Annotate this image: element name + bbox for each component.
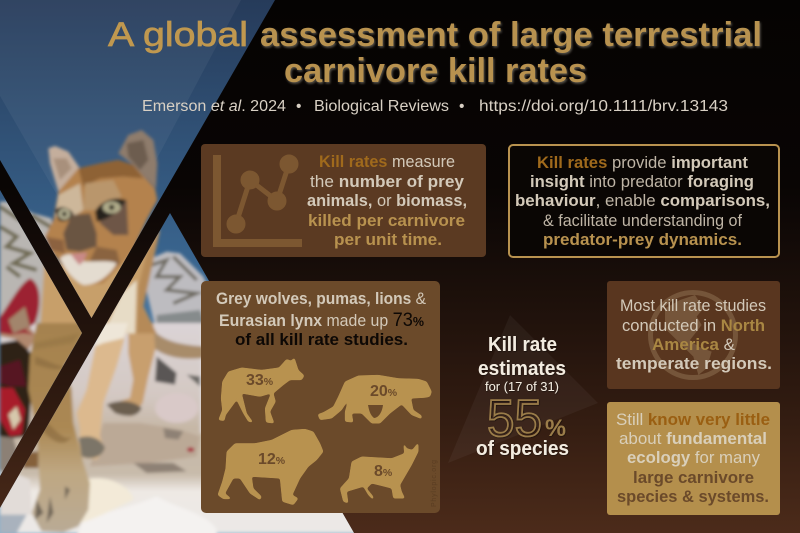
panel: knowledge gaps: large carnivore xyxy=(633,469,754,487)
citation line: • xyxy=(459,98,464,115)
citation line: Biological Reviews xyxy=(314,98,449,115)
panel: kill rate definition xyxy=(201,144,486,257)
icon: lynx xyxy=(340,442,418,503)
species text: Grey wolves, pumas, lions & xyxy=(216,290,426,308)
geography text: temperate regions. xyxy=(616,355,772,373)
panel: knowledge gaps: about fundamental xyxy=(619,430,767,448)
panel: geographic bias xyxy=(607,281,780,389)
icon: background triangle xyxy=(448,315,598,463)
photo: puma on a kill in snowy mountains xyxy=(0,0,367,533)
species percentages xyxy=(246,372,398,480)
panel: most studied species xyxy=(201,281,440,513)
callout: 55% of species: of species xyxy=(476,438,569,460)
icon: line chart xyxy=(217,155,302,243)
title xyxy=(108,16,762,90)
callout: 55% of species xyxy=(476,334,569,460)
citation line: https://doi.org/10.1111/brv.13143 xyxy=(479,98,728,115)
icon: grey wolf xyxy=(218,358,304,423)
callout: 55% of species: for (17 of 31) xyxy=(485,379,559,394)
panel: why kill rates matter: predator-prey dynamics. xyxy=(543,231,742,249)
panel: why kill rates matter: behaviour, enable comparisons, xyxy=(515,192,770,210)
panel: why kill rates matter: Kill rates provide important xyxy=(537,154,748,172)
silhouettes xyxy=(218,358,432,505)
definition text: Kill rates measure xyxy=(319,153,455,171)
callout: 55% of species: % xyxy=(545,415,566,442)
geography text: Most kill rate studies xyxy=(620,297,766,315)
definition text: the number of prey xyxy=(310,173,465,191)
panel: why kill rates matter: insight into predator foraging xyxy=(530,173,754,191)
species percentages: 12% xyxy=(258,451,286,468)
title: carnivore kill rates xyxy=(284,52,587,90)
icon: globe xyxy=(650,292,736,378)
species percentages: 33% xyxy=(246,372,274,389)
mountains xyxy=(0,202,217,333)
panel: why kill rates matter: & facilitate understanding of xyxy=(543,212,742,230)
tail and far hind leg xyxy=(107,323,203,416)
species percentages: 8% xyxy=(374,463,393,480)
carcass xyxy=(0,323,38,476)
geography text: conducted in North xyxy=(622,317,765,335)
title: A global xyxy=(108,16,248,54)
geography text: America & xyxy=(652,336,735,354)
species text: of all kill rate studies. xyxy=(235,331,408,349)
panel: knowledge gaps: species & systems. xyxy=(617,488,769,506)
definition text: animals, or biomass, xyxy=(307,192,467,210)
species text: Eurasian lynx made up 73% xyxy=(219,310,424,331)
species text xyxy=(216,290,426,349)
callout: 55% of species: 55 xyxy=(487,390,542,448)
snowy ground and rocks xyxy=(0,323,367,533)
definition text: killed per carnivore xyxy=(308,212,465,230)
citation line: Emerson et al. 2024 xyxy=(142,98,286,115)
geography text xyxy=(616,297,772,373)
callout: 55% of species: estimates xyxy=(478,358,566,380)
panel: why kill rates matter xyxy=(509,145,779,257)
icon: puma xyxy=(318,375,432,423)
neck and chest xyxy=(40,230,160,333)
silhouette credit: Phylopic.org xyxy=(431,460,438,507)
puma head xyxy=(45,130,157,285)
citation line: • xyxy=(296,98,301,115)
panel: knowledge gaps: ecology for many xyxy=(627,449,761,467)
definition text xyxy=(307,153,467,249)
definition text: per unit time. xyxy=(334,231,442,249)
icon: lion xyxy=(218,429,323,505)
panel: knowledge gaps: Still know very little xyxy=(616,411,770,429)
puma leg gap xyxy=(368,405,383,418)
citation line xyxy=(142,98,728,115)
title: assessment of large terrestrial xyxy=(260,16,762,54)
puma legs xyxy=(28,323,128,532)
callout: 55% of species: Kill rate xyxy=(488,334,557,356)
species percentages: 20% xyxy=(370,383,398,400)
panel: knowledge gaps xyxy=(607,402,780,515)
